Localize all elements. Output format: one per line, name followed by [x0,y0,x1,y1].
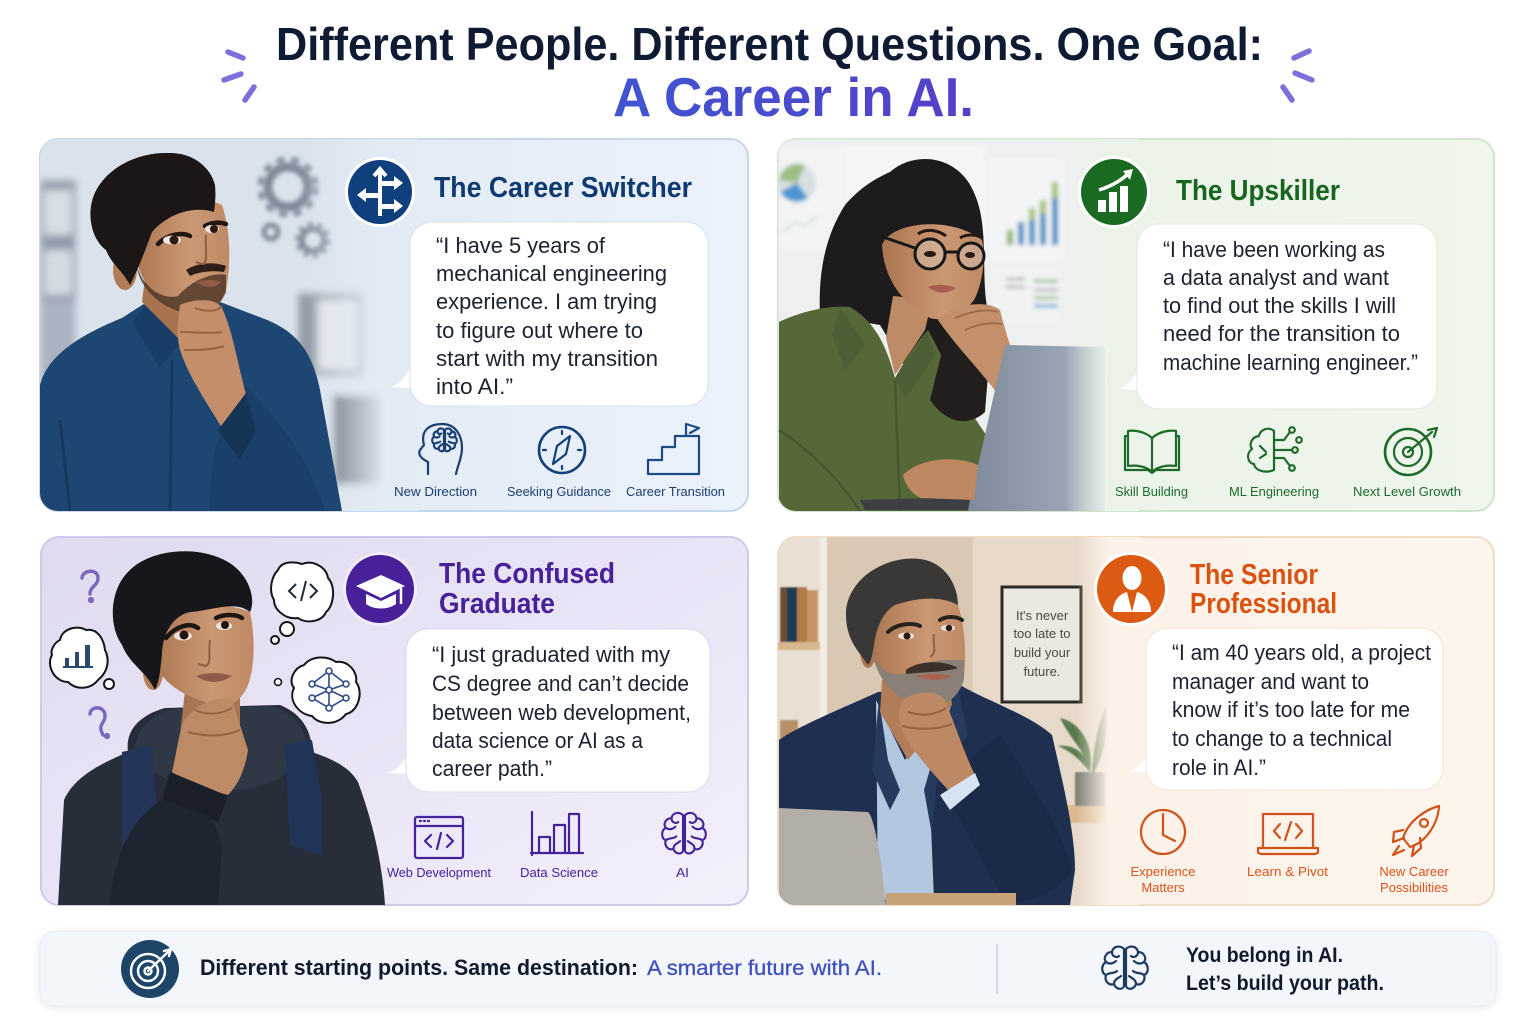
photo: career switcher [30,130,418,520]
label: ML Engineering [1229,484,1319,499]
speech bubble: know if it’s too late for me [1172,697,1410,722]
heading: Professional [1190,588,1337,620]
icon: head with brain [419,424,462,474]
label: New Direction [394,484,477,499]
shirt [779,307,990,511]
label: Possibilities [1380,880,1448,895]
glasses [880,236,984,269]
neck [142,280,223,338]
beard [872,650,964,708]
cuff [218,393,256,460]
speech bubble: “I have 5 years of [436,233,606,258]
icon badge: crossroads [345,157,415,227]
laptop [968,345,1105,511]
face [161,606,254,703]
sleeve [940,735,1072,903]
label: Career Transition [626,484,725,499]
label: Web Development [387,865,491,880]
speech bubble: a data analyst and want [1163,265,1389,290]
brows and eyes [166,615,242,638]
thought bubble: chart [50,628,114,689]
heading: The Upskiller [1176,175,1340,207]
heading: Graduate [439,588,555,620]
speech bubble: start with my transition [436,346,658,371]
speech bubble: to find out the skills I will [1163,293,1396,318]
hair back [820,159,987,364]
shirt [40,300,342,511]
heading [1190,559,1337,620]
poster: future. [1024,664,1060,679]
hand [172,698,248,795]
icon: browser code [415,817,463,858]
speech bubble: to change to a technical [1172,726,1392,751]
face [870,596,965,706]
speech bubble: need for the transition to [1163,321,1400,346]
panel: The Upskiller [778,139,1494,511]
suit [779,685,1075,905]
icon: rocket [1393,806,1439,856]
icon: brain [662,813,706,853]
icon badge: growth chart [1078,156,1150,228]
icon: target [121,940,179,998]
label: Matters [1141,880,1185,895]
shirt [876,690,952,900]
poster: too late to [1013,626,1071,641]
icon: right sparks [1283,51,1312,100]
speech bubble: “I have been working as [1163,237,1385,262]
label: Skill Building [1115,484,1188,499]
poster: It's never [1016,608,1069,623]
speech bubble [1128,628,1443,790]
hair [90,153,215,285]
title: Different People. Different Questions. One Goal: [276,18,1263,70]
thought bubble: network [274,657,360,723]
photo: confused graduate [58,551,385,905]
speech bubble: between web development, [432,700,691,725]
panel: The Senior Professional [778,537,1494,905]
icon: question marks [82,571,108,737]
speech bubble [1118,224,1437,409]
heading: The Career Switcher [434,172,692,204]
label: Experience [1130,864,1196,879]
poster [1002,587,1081,702]
label [1379,864,1449,895]
speech bubble: to figure out where to [436,318,643,343]
speech bubble: experience. I am trying [436,289,657,314]
heading [439,558,615,620]
panel: The Career Switcher [30,130,748,520]
poster: build your [1014,645,1071,660]
label: New Career [1379,864,1449,879]
heading: The Senior [1190,559,1318,591]
footer banner [40,931,1496,1006]
hand [899,692,975,790]
footer message: Different starting points. Same destination: [200,955,638,980]
hair front strand [930,355,988,422]
hand [938,304,1012,392]
ear [113,263,137,290]
icon: target with arrow [1385,428,1437,475]
label: Next Level Growth [1353,484,1461,499]
label: Learn & Pivot [1247,864,1328,879]
speech bubble: into AI.” [436,374,513,399]
footer message [200,955,882,980]
neck [886,296,932,375]
footer call to action: You belong in AI. [1186,944,1343,967]
footer call to action [1186,944,1384,995]
beard [137,268,226,312]
ear [143,672,163,690]
hair [113,551,252,690]
photo: senior professional [778,537,1139,905]
speech bubble: “I just graduated with my [432,642,670,667]
title [276,18,1263,128]
icon: bar chart [531,812,583,855]
footer message: A smarter future with AI. [647,957,882,980]
heading: The Confused [439,558,615,590]
neck [880,680,952,760]
panel: The Confused Graduate [41,537,748,905]
label: AI [676,865,689,880]
laptop [779,808,886,905]
face [138,202,230,297]
icon: brain [1102,947,1148,989]
label [1130,864,1196,895]
speech bubble: manager and want to [1172,669,1369,694]
speech bubble: career path.” [432,756,552,781]
hoodie [58,705,385,905]
title: A Career in AI. [613,66,974,128]
footer call to action: Let’s build your path. [1186,972,1384,995]
speech bubble [390,222,708,406]
speech bubble: “I am 40 years old, a project [1172,640,1431,665]
icon: laptop code [1258,814,1318,854]
speech bubble [388,629,710,792]
speech bubble: CS degree and can’t decide [432,671,689,696]
photo: upskiller [778,139,1139,511]
icon: open book [1125,431,1179,473]
plant [1058,706,1107,806]
sleeve [110,795,222,905]
speech bubble: mechanical engineering [436,261,667,286]
brows and eyes [158,223,226,244]
speech bubble: machine learning engineer.” [1163,350,1418,375]
face [882,224,984,319]
icon: left sparks [224,52,254,100]
icon: brain circuit [1248,427,1302,472]
straps [122,745,156,848]
speech bubble: role in AI.” [1172,755,1266,780]
neck [180,694,240,733]
brows and eyes [888,617,962,632]
icon badge: professional [1094,552,1168,626]
hand [178,300,246,428]
label: Data Science [520,865,598,880]
typing hand [903,459,978,500]
icon: clock [1141,810,1185,854]
icon: stairs with flag [648,424,699,474]
speech bubble: data science or AI as a [432,728,644,753]
thought bubble: code [271,562,333,644]
icon: compass [539,427,585,473]
label: Seeking Guidance [507,484,611,499]
hair [846,558,958,665]
cuff [162,772,228,822]
icon badge: graduation cap [343,552,417,626]
